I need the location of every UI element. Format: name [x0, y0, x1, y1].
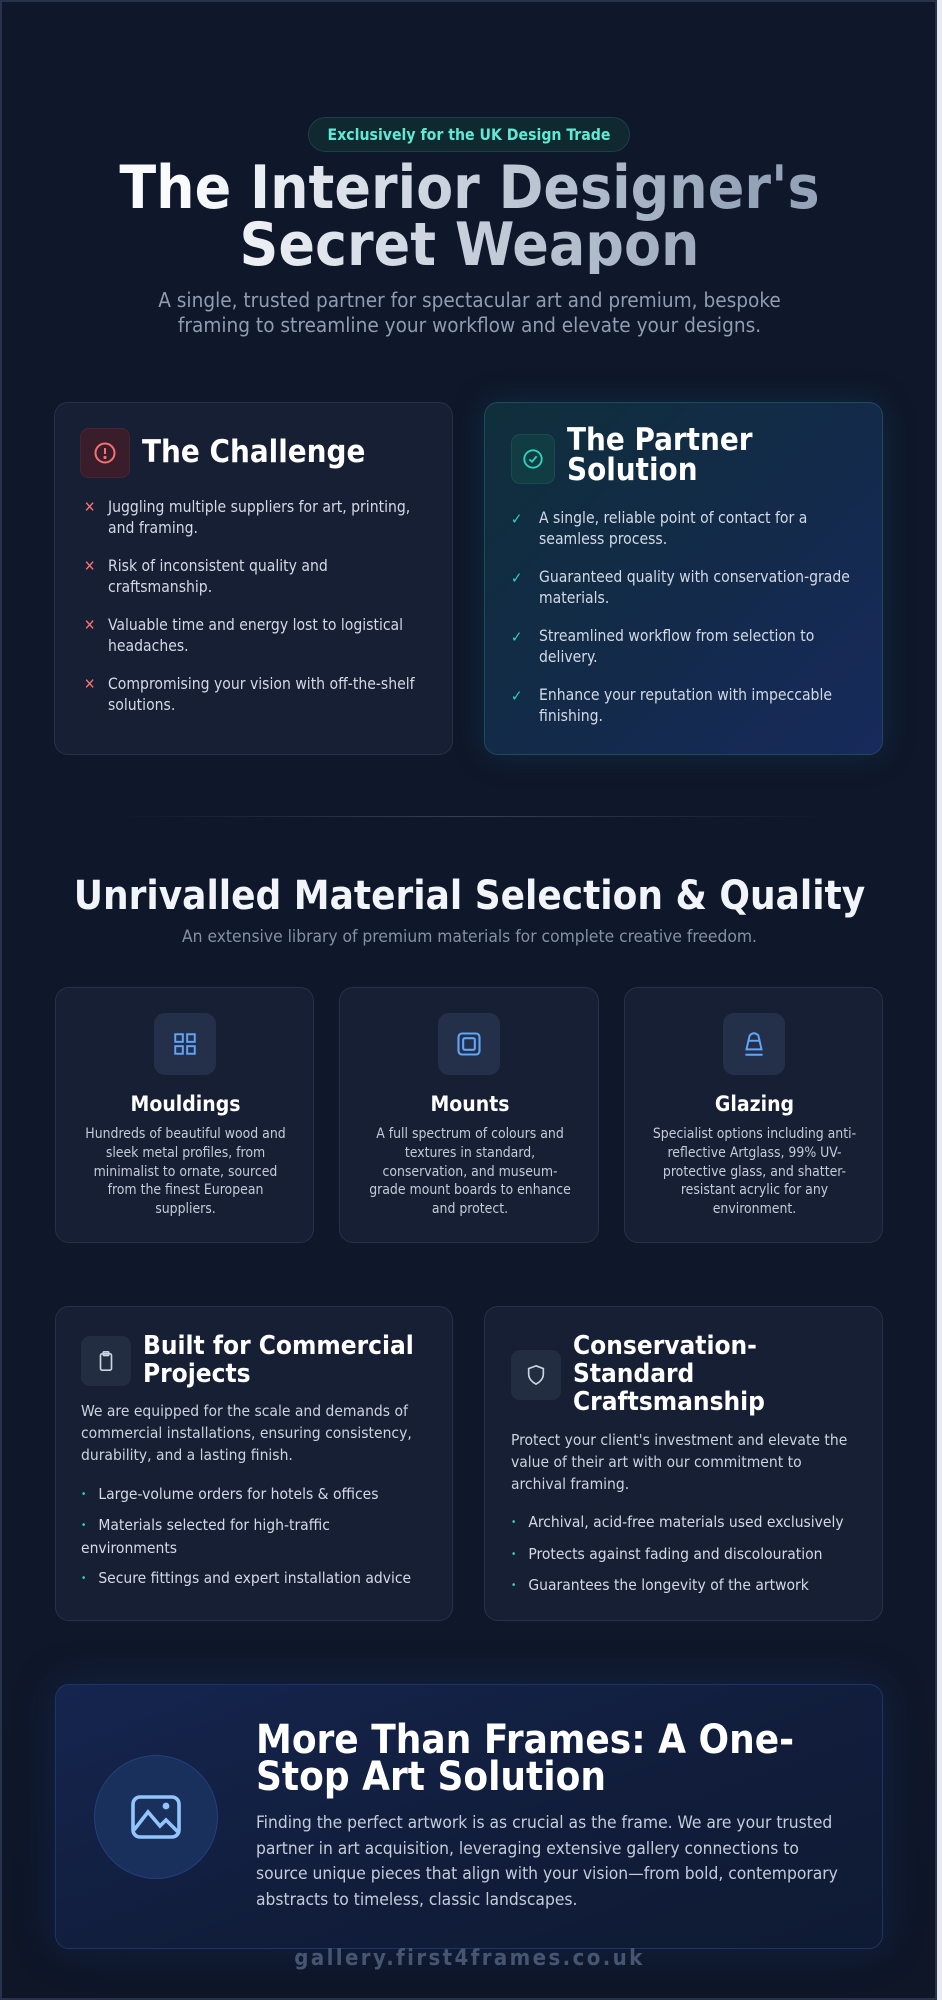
description: environment.	[713, 1201, 796, 1217]
icon: shield	[511, 1350, 561, 1400]
paragraph: source unique pieces that align with your vision—from bold, contemporary	[256, 1864, 838, 1884]
heading: Projects	[143, 1359, 251, 1389]
bullet list	[81, 1485, 411, 1587]
solution list: A single, reliable point of contact for a seamless process.	[539, 509, 807, 548]
icon: mount	[438, 1013, 500, 1075]
bullet list: • Large-volume orders for hotels & offices	[81, 1485, 378, 1503]
panel: conservation	[484, 1306, 883, 1621]
challenge list: Valuable time and energy lost to logistical headaches.	[108, 616, 403, 655]
solution list: Enhance your reputation with impeccable finishing.	[539, 686, 832, 725]
title: Mouldings	[131, 1092, 240, 1116]
description	[85, 1126, 286, 1217]
bullet list: • Protects against fading and discolouration	[511, 1545, 822, 1563]
title: Mounts	[430, 1092, 509, 1116]
panel: glazing	[624, 987, 883, 1243]
footer url: gallery.first4frames.co.uk	[294, 1946, 645, 1971]
title	[2, 160, 937, 274]
paragraph: We are equipped for the scale and demands of	[81, 1402, 408, 1420]
heading: Standard	[573, 1359, 694, 1389]
solution list: ✓	[511, 569, 522, 587]
solution list: ✓	[511, 687, 522, 705]
description	[653, 1126, 856, 1217]
description: Hundreds of beautiful wood and	[85, 1126, 286, 1142]
badge: Exclusively for the UK Design Trade	[328, 125, 610, 144]
section heading: materials: Unrivalled Material Selection & Quality	[74, 873, 865, 919]
icon: image in circle	[94, 1755, 218, 1879]
solution list: ✓	[511, 628, 522, 646]
subtitle	[158, 288, 781, 337]
icon: grid	[154, 1013, 216, 1075]
title: Secret Weapon	[240, 210, 699, 280]
paragraph: durability, and a lasting finish.	[81, 1446, 293, 1464]
description: reflective Artglass, 99% UV-	[667, 1145, 842, 1161]
badge	[308, 117, 630, 152]
paragraph: abstracts to timeless, classic landscapes.	[256, 1890, 577, 1910]
challenge list: ✕	[84, 675, 95, 693]
description: from the finest European	[108, 1182, 263, 1198]
description: suppliers.	[155, 1201, 216, 1217]
panel: one-stop art solution	[55, 1684, 883, 1949]
heading: challenge: The Challenge	[142, 434, 365, 470]
paragraph	[256, 1813, 838, 1910]
challenge list: ✕	[84, 498, 95, 516]
description: sleek metal profiles, from	[106, 1145, 265, 1161]
heading	[573, 1331, 765, 1417]
description	[369, 1126, 571, 1217]
challenge list	[84, 498, 415, 714]
description: A full spectrum of colours and	[376, 1126, 564, 1142]
heading	[256, 1717, 794, 1800]
heading: partner solution: The Partner	[567, 422, 753, 458]
paragraph: archival framing.	[511, 1475, 629, 1493]
heading: partner solution: Solution	[567, 452, 698, 488]
description: Specialist options including anti-	[653, 1126, 856, 1142]
challenge list: Juggling multiple suppliers for art, printing, and framing.	[108, 498, 410, 537]
heading: Craftsmanship	[573, 1387, 765, 1417]
paragraph: Protect your client's investment and elevate the	[511, 1431, 847, 1449]
title: Glazing	[715, 1092, 794, 1116]
icon: glass	[723, 1013, 785, 1075]
heading: Conservation-	[573, 1331, 757, 1361]
bullet list: • Archival, acid-free materials used exclusively	[511, 1513, 844, 1531]
description: grade mount boards to enhance	[369, 1182, 571, 1198]
challenge list: Compromising your vision with off-the-shelf solutions.	[108, 675, 415, 714]
icon: clipboard	[81, 1336, 131, 1386]
panel: partner solution	[484, 402, 883, 755]
bullet list: environments	[81, 1539, 177, 1557]
heading: partner solution	[567, 422, 753, 488]
description: minimalist to ornate, sourced	[94, 1164, 277, 1180]
panel: challenge	[54, 402, 453, 755]
heading: Built for Commercial	[143, 1331, 414, 1361]
heading: More Than Frames: A One-	[256, 1717, 794, 1763]
solution list	[511, 509, 850, 725]
panel: mouldings	[55, 987, 314, 1243]
description: textures in standard,	[405, 1145, 535, 1161]
section subtitle: An extensive library of premium materials for complete creative freedom.	[182, 927, 757, 947]
description: and protect.	[432, 1201, 508, 1217]
paragraph: Finding the perfect artwork is as crucial as the frame. We are your trusted	[256, 1813, 832, 1833]
solution list: ✓	[511, 510, 522, 528]
heading	[143, 1331, 414, 1389]
bullet list: • Materials selected for high-traffic	[81, 1516, 330, 1534]
description: resistant acrylic for any	[681, 1182, 828, 1198]
solution list: Guaranteed quality with conservation-grade materials.	[539, 568, 850, 607]
bullet list	[511, 1513, 844, 1594]
description: protective glass, and shatter-	[663, 1164, 846, 1180]
subtitle: framing to streamline your workflow and elevate your designs.	[178, 313, 761, 337]
panel: mounts	[339, 987, 599, 1243]
paragraph: value of their art with our commitment to	[511, 1453, 802, 1471]
challenge list: ✕	[84, 557, 95, 575]
bullet list: • Guarantees the longevity of the artwork	[511, 1576, 809, 1594]
paragraph	[511, 1431, 847, 1493]
panel: commercial	[55, 1306, 453, 1621]
description: conservation, and museum-	[382, 1164, 558, 1180]
title: The Interior Designer's	[119, 153, 820, 223]
challenge list: ✕	[84, 616, 95, 634]
challenge list: Risk of inconsistent quality and craftsmanship.	[108, 557, 328, 596]
heading: Stop Art Solution	[256, 1754, 606, 1800]
solution list: Streamlined workflow from selection to delivery.	[539, 627, 814, 666]
paragraph: partner in art acquisition, leveraging extensive gallery connections to	[256, 1838, 799, 1858]
paragraph: commercial installations, ensuring consistency,	[81, 1424, 412, 1442]
icon: check circle	[511, 434, 555, 484]
bullet list: • Secure fittings and expert installation advice	[81, 1569, 411, 1587]
icon: alert	[80, 428, 130, 478]
paragraph	[81, 1402, 412, 1464]
subtitle: A single, trusted partner for spectacular art and premium, bespoke	[158, 288, 781, 312]
